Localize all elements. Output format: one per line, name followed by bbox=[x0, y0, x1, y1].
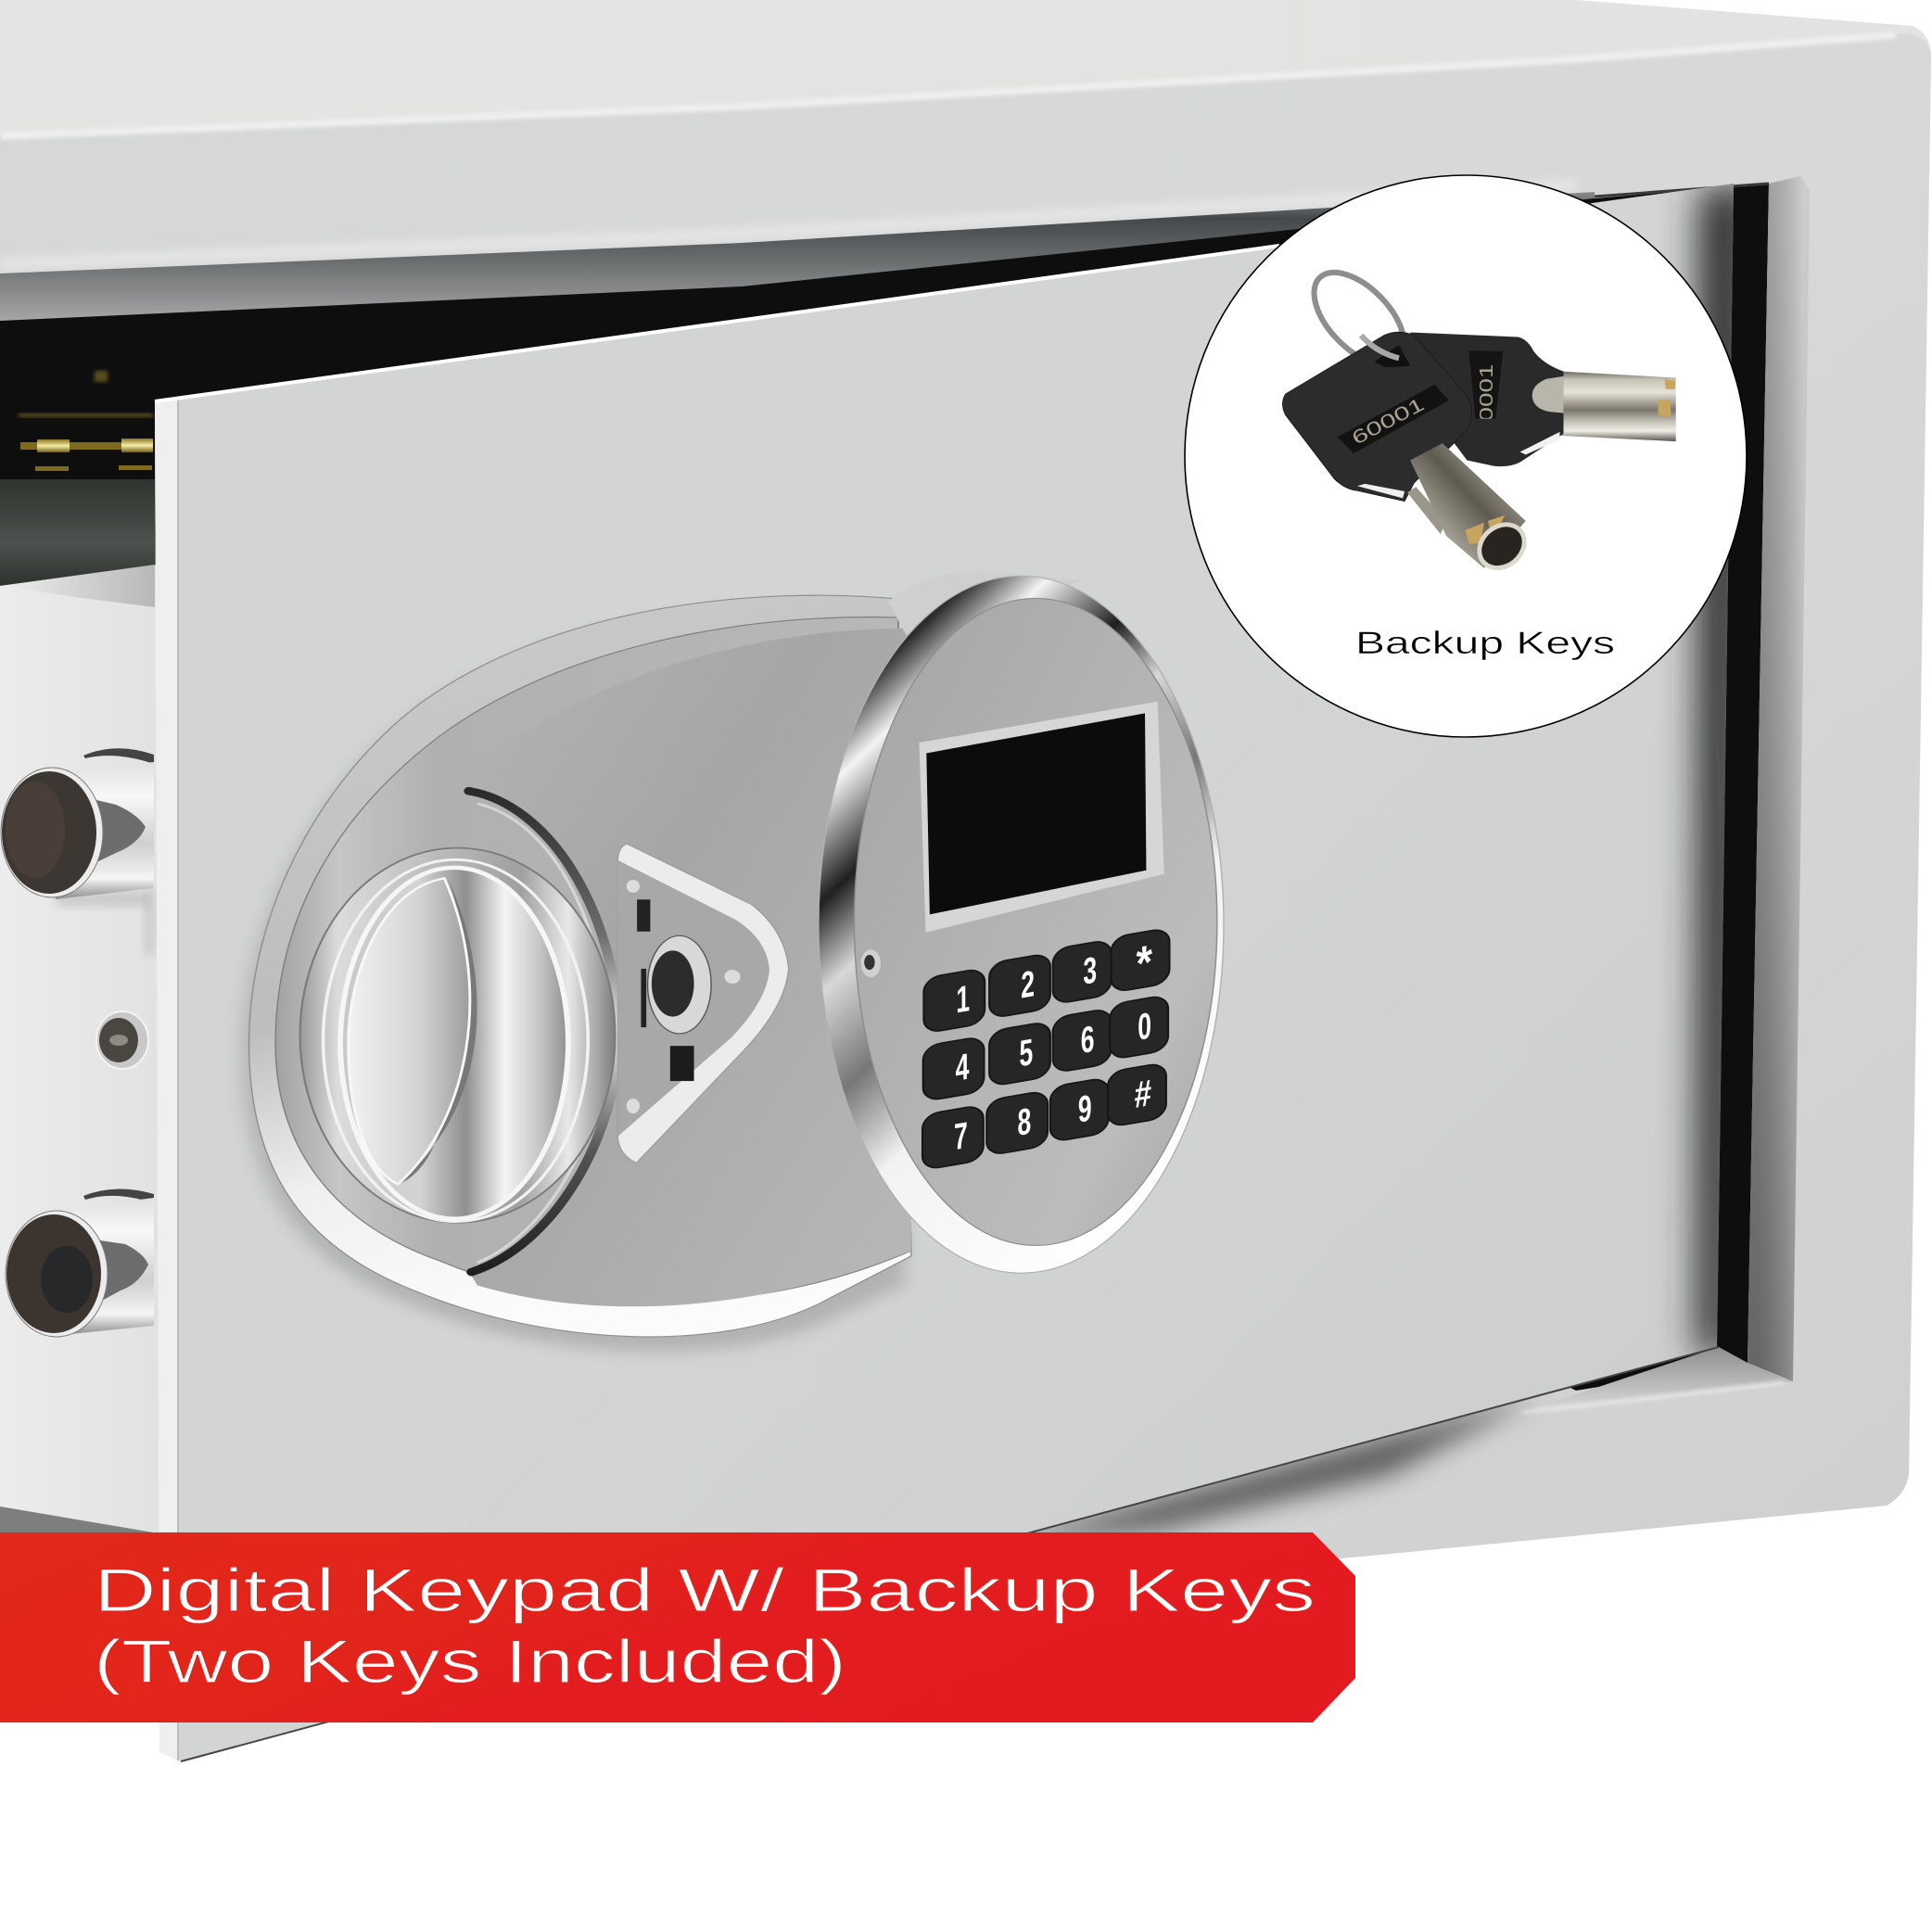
icon: pair of keys bbox=[1282, 257, 1676, 580]
keypad buttons: 7 bbox=[954, 1115, 968, 1159]
keypad buttons: 5 bbox=[1019, 1032, 1033, 1075]
door face bbox=[155, 184, 1734, 1761]
microphone hole bbox=[861, 949, 881, 977]
safe door bbox=[155, 181, 1752, 1761]
display screen bbox=[926, 713, 1146, 914]
lower bolt bbox=[6, 1188, 154, 1337]
front key label bbox=[1338, 385, 1449, 453]
door shadow on bolt panel bbox=[145, 890, 155, 955]
dark interior opening bbox=[0, 184, 1769, 1391]
electronic lock assembly bbox=[242, 571, 1224, 1352]
red banner bbox=[0, 1532, 1355, 1722]
keypad buttons: 9 bbox=[1078, 1087, 1092, 1131]
front key label: 60001 bbox=[1349, 394, 1428, 450]
callout label: Backup Keys bbox=[1355, 626, 1615, 661]
rotary handle bbox=[340, 868, 568, 1219]
keypad buttons: 0 bbox=[1138, 1005, 1151, 1049]
back key head bbox=[1410, 333, 1564, 466]
front key head bbox=[1282, 332, 1472, 502]
screw bbox=[96, 1011, 148, 1069]
keypad housing bulge bbox=[888, 571, 1084, 644]
key ring bbox=[1298, 257, 1420, 380]
banner heading bbox=[94, 1556, 1316, 1696]
bolt panel on door side bbox=[0, 565, 159, 1539]
banner heading: Digital Keypad W/ Backup Keys bbox=[94, 1556, 1316, 1624]
inner frame bottom bevel bbox=[1520, 1347, 1793, 1413]
frame underside gray band bbox=[0, 192, 1595, 323]
back plate inner bbox=[275, 617, 911, 1302]
chrome rim bbox=[819, 576, 1224, 1273]
front key tube bbox=[1407, 443, 1536, 580]
keypad buttons: # bbox=[1135, 1072, 1151, 1116]
banner heading: (Two Keys Included) bbox=[94, 1627, 846, 1696]
back key tube bbox=[1561, 372, 1676, 441]
key lock window bbox=[617, 844, 789, 1163]
inner frame right side bbox=[1748, 176, 1810, 1381]
callout circle: backup keys bbox=[1185, 175, 1747, 737]
keypad buttons: 1 bbox=[956, 978, 970, 1022]
back plate outer rim bbox=[249, 595, 911, 1337]
gray wedge bbox=[0, 565, 155, 607]
ring slot bbox=[1374, 345, 1410, 368]
keypad buttons: 6 bbox=[1081, 1018, 1095, 1062]
upper bolt bbox=[1, 748, 154, 899]
chrome arc bbox=[469, 791, 620, 1272]
keypad disc bbox=[819, 576, 1224, 1273]
callout disc bbox=[1185, 175, 1747, 737]
keypad buttons bbox=[922, 928, 1169, 1170]
keypad buttons: 8 bbox=[1017, 1100, 1031, 1144]
keypad buttons: * bbox=[1137, 935, 1152, 991]
handle recess bbox=[300, 848, 616, 1223]
lock soft shadow bbox=[242, 608, 905, 1352]
keypad buttons: 2 bbox=[1021, 963, 1035, 1007]
door right edge shading bbox=[1697, 181, 1752, 1355]
door shadow on frame bbox=[983, 1395, 1539, 1546]
back key nose bbox=[1532, 376, 1564, 413]
brushed plate bbox=[467, 629, 911, 1306]
back key label bbox=[1468, 350, 1503, 439]
back key label: 60001 bbox=[1477, 363, 1497, 436]
display frame bbox=[919, 702, 1164, 933]
banner shape bbox=[0, 1532, 1355, 1722]
interior shelf bbox=[0, 479, 155, 586]
brass hinge bbox=[19, 371, 153, 471]
keypad buttons: 4 bbox=[956, 1046, 969, 1089]
disc face bbox=[854, 598, 1217, 1245]
keypad buttons: 3 bbox=[1083, 949, 1097, 993]
door top highlight bbox=[155, 246, 1279, 401]
door hinge-edge strip bbox=[155, 399, 178, 1760]
lower wedge bbox=[0, 1506, 153, 1532]
door bottom edge bbox=[181, 1347, 1719, 1761]
